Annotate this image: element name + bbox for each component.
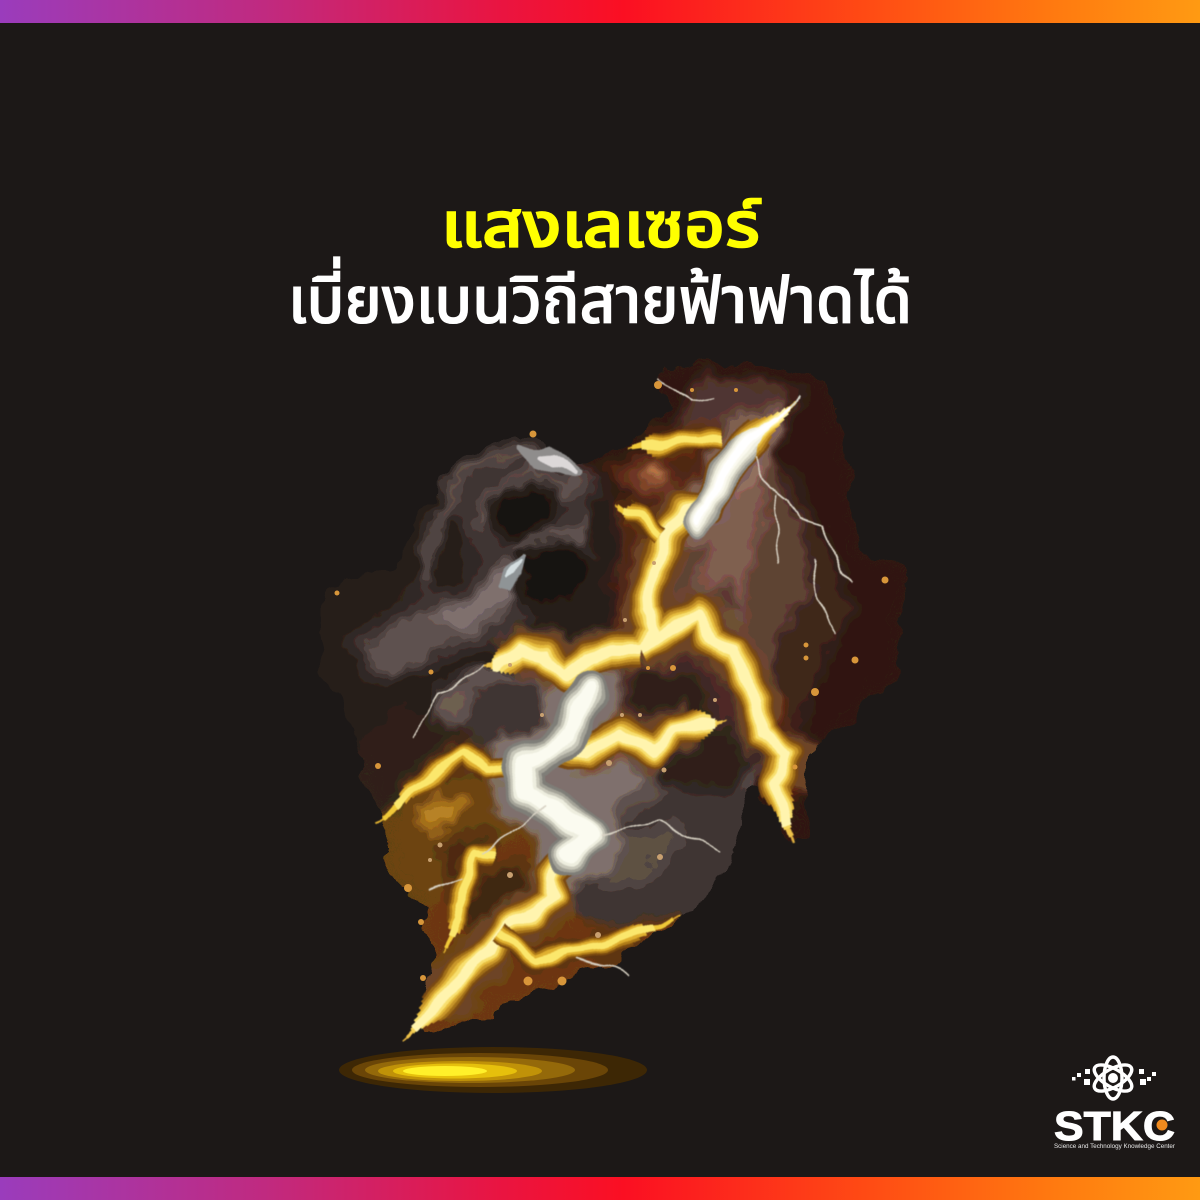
bottom gradient bar [0,1177,1200,1200]
logo tagline: Science and Technology Knowledge Center [1054,1143,1176,1150]
white bolt core: upper spear [695,397,800,522]
halos around bolts [400,397,800,1040]
logo orange dot [1156,1120,1168,1130]
title: yellow heading: แสงเลเซอร์ [441,191,762,261]
storm cloud [325,365,905,1040]
lightning bolts [375,380,850,1040]
logo wordmark: STKC [1054,1103,1175,1149]
sparks [334,381,888,986]
gold bolt bands [400,397,800,1040]
subtitle: white heading: เบี่ยงเบนวิถีสายฟ้าฟาดได้ [288,256,912,337]
cloud highlights [500,450,580,590]
gold branch bands [375,438,722,960]
logo: STKC [1054,1057,1176,1150]
top gradient bar [0,0,1200,23]
ground glow ellipse [339,1047,647,1093]
icon: atom emblem [1072,1057,1156,1099]
thin white arcs [410,380,850,974]
white bolt core: central section [520,690,590,857]
